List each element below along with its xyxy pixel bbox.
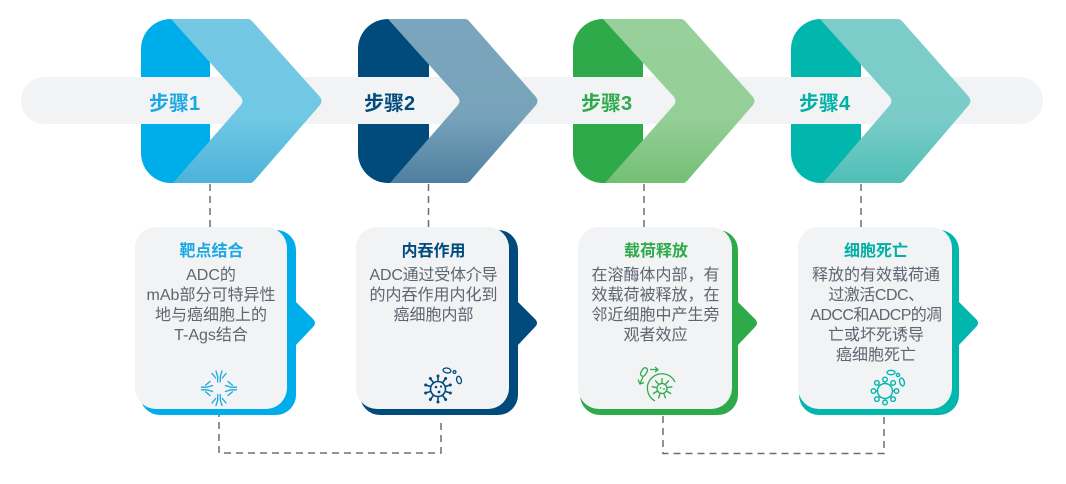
card 4 body text: 亡或坏死诱导 — [828, 326, 924, 344]
step 1 colour tab — [141, 19, 210, 183]
card 1 body text: 地与癌细胞上的 — [155, 306, 267, 324]
step 3 label: 步骤3 — [581, 92, 632, 115]
card 4 body text: 过激活CDC、 — [828, 286, 924, 304]
step 2 chevron — [388, 19, 538, 183]
connector: card 1 to card 2 — [219, 410, 441, 453]
panel: step 1 card — [135, 227, 315, 415]
card 3 body text: 在溶酶体内部，有 — [591, 266, 720, 284]
card 1 backing with pointer — [140, 230, 315, 415]
card 2 body text: ADC通过受体介导 — [370, 266, 498, 284]
step 3 chevron — [603, 19, 754, 183]
step 3 colour tab — [573, 19, 643, 183]
card 2 heading: 内吞作用 — [401, 242, 466, 260]
step 2 colour tab — [358, 19, 429, 183]
step 2 label: 步骤2 — [364, 92, 415, 115]
panel: step 3 card — [578, 227, 757, 415]
icon: antibodies — [202, 371, 236, 406]
step 4 label: 步骤4 — [799, 92, 851, 115]
card 2 body text: 癌细胞内部 — [393, 306, 474, 324]
connector: step 1 to card — [209, 184, 211, 227]
card 4 body text: 释放的有效载荷通 — [812, 266, 940, 284]
icon: payload release — [638, 367, 675, 401]
connector: step 4 to card — [860, 184, 862, 227]
step 1 chevron — [171, 19, 322, 183]
card 3 heading: 载荷释放 — [624, 241, 688, 260]
step 4 colour tab — [791, 19, 861, 183]
card 3 body text: 效载荷被释放，在 — [591, 286, 720, 304]
card 4 backing with pointer — [799, 230, 978, 415]
process bar — [21, 77, 1043, 124]
card 2 body text: 的内吞作用内化到 — [369, 286, 498, 304]
card 1 heading: 靶点结合 — [179, 241, 244, 260]
connector: step 3 to card — [643, 184, 645, 227]
card 3 face — [578, 227, 732, 409]
icon: virus with vesicles — [424, 367, 462, 404]
icon: dying cell — [871, 370, 905, 405]
card 4 heading: 细胞死亡 — [844, 242, 908, 260]
card 2 face — [356, 227, 509, 409]
step 1 label: 步骤1 — [149, 92, 200, 115]
card 2 backing with pointer — [360, 230, 537, 415]
panel: step 4 card — [798, 227, 978, 415]
card 1 body text: ADC的 — [186, 266, 236, 284]
card 3 body text: 邻近细胞中产生旁 — [591, 306, 720, 324]
card 4 body text: ADCC和ADCP的凋 — [810, 306, 942, 324]
card 1 face — [135, 227, 287, 409]
card 1 body text: T-Ags结合 — [174, 326, 248, 344]
card 3 body text: 观者效应 — [623, 325, 688, 344]
panel: step 2 card — [356, 227, 537, 415]
card 3 backing with pointer — [580, 230, 757, 415]
connector: step 2 to card — [428, 184, 430, 227]
step 4 chevron — [820, 19, 970, 183]
card 1 body text: mAb部分可特异性 — [147, 286, 275, 304]
connector: card 3 to card 4 — [663, 416, 884, 454]
card 4 face — [798, 227, 952, 409]
card 4 body text: 癌细胞死亡 — [836, 346, 916, 364]
